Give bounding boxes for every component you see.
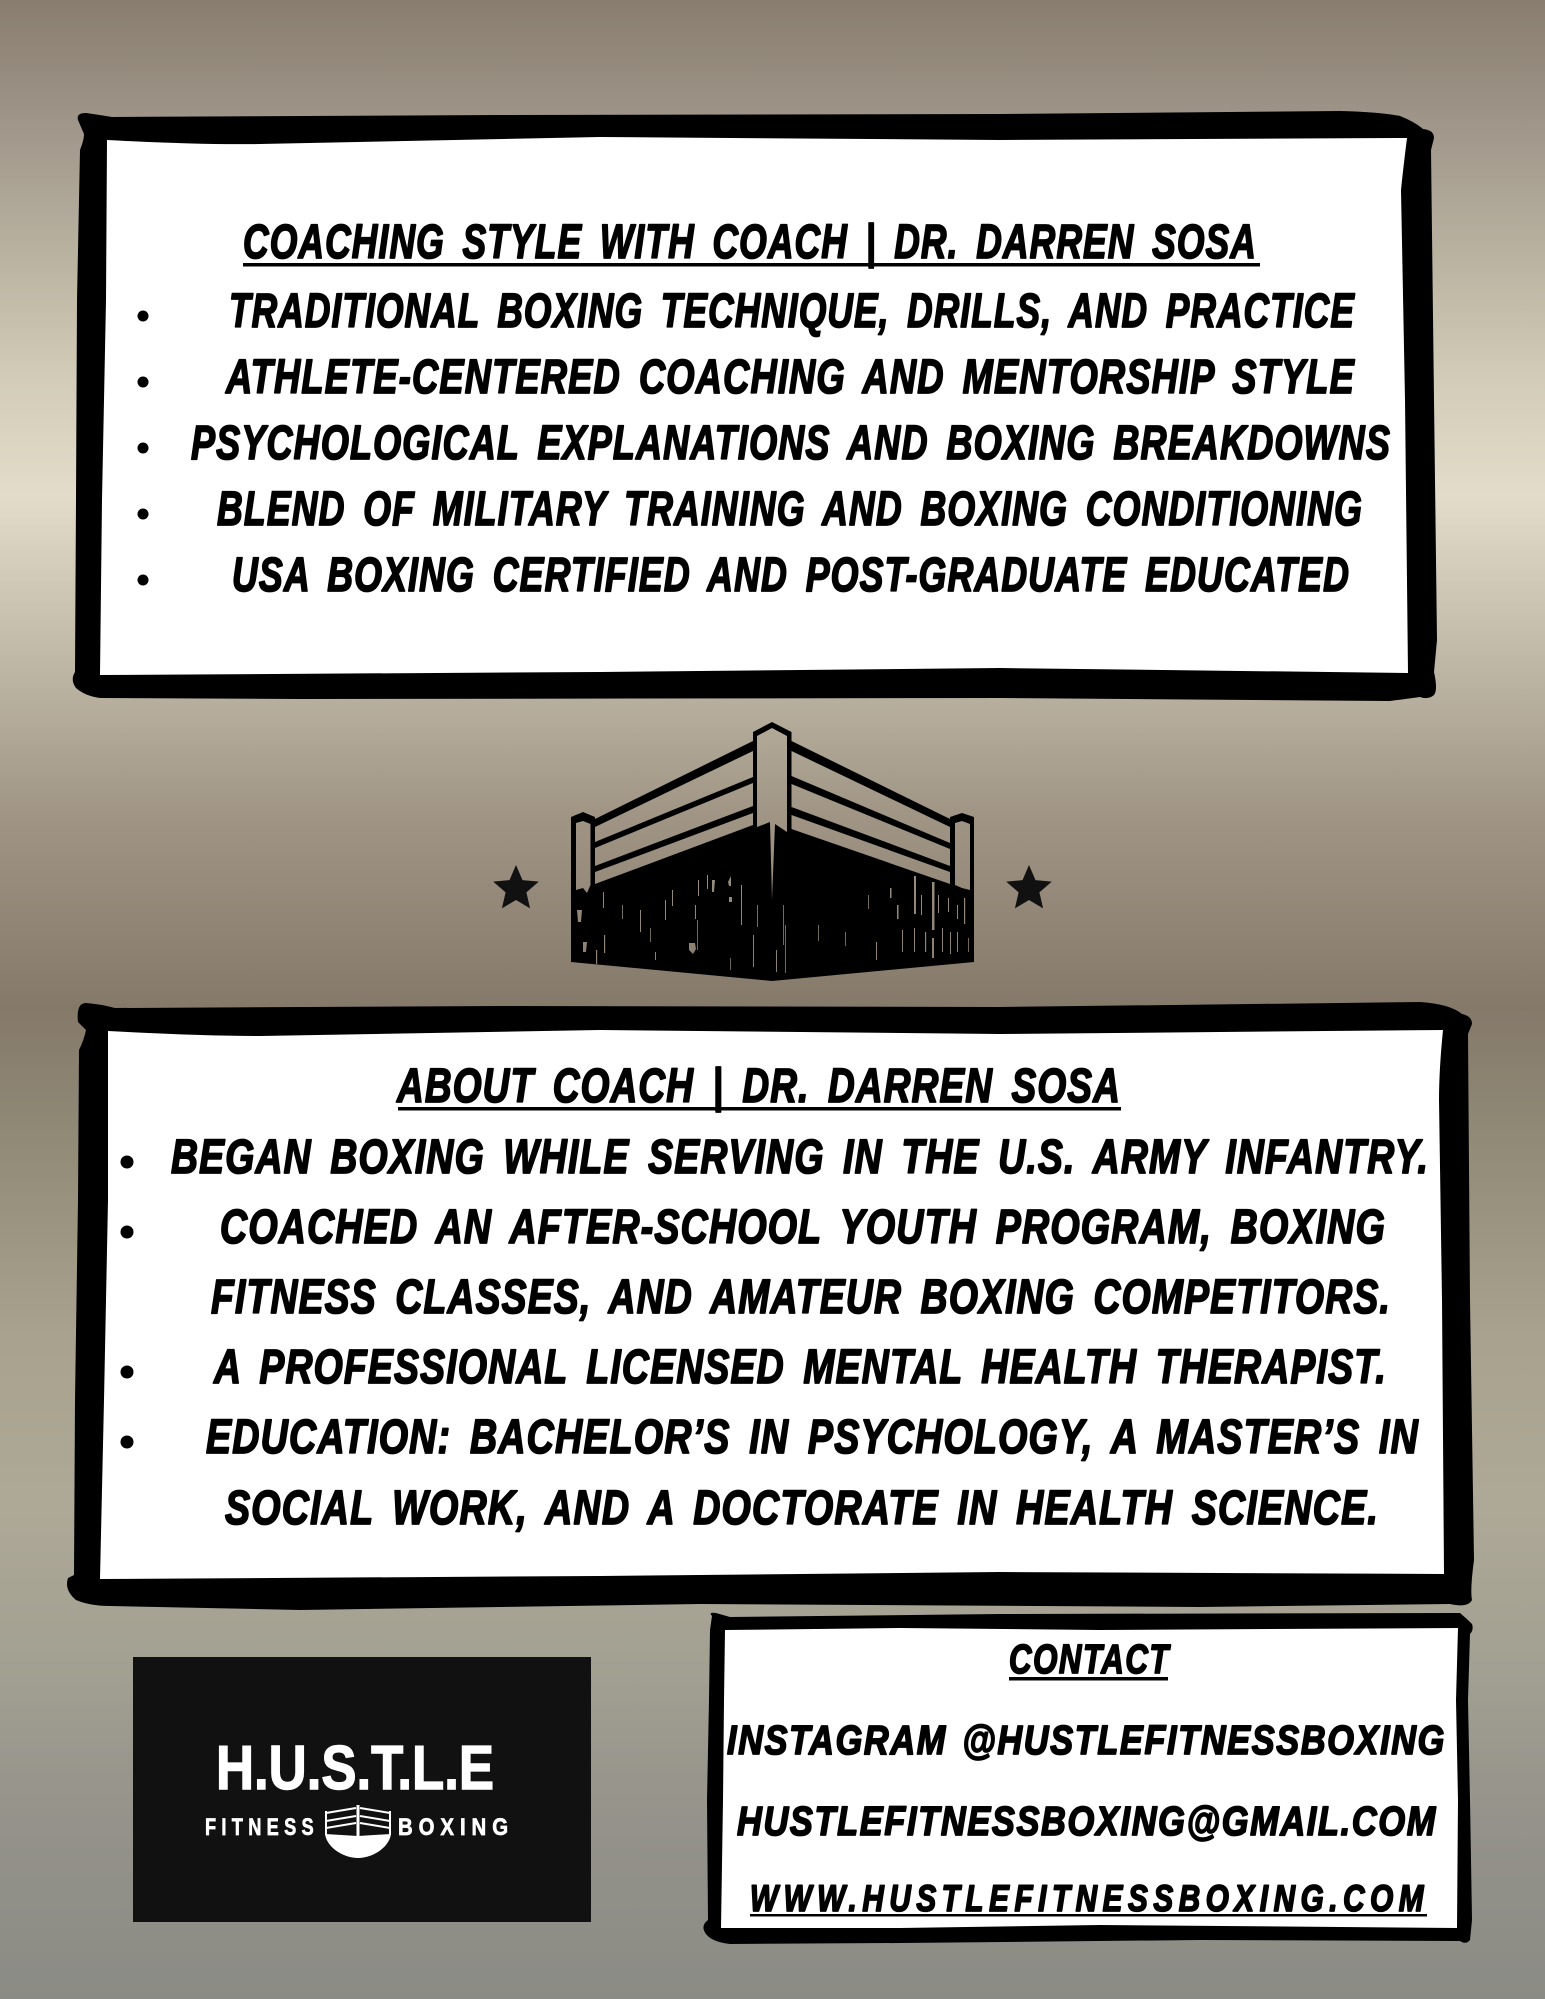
- panel: about coach: [67, 1002, 1474, 1610]
- panel: coaching style: [73, 111, 1437, 701]
- icon: star left: [493, 865, 539, 908]
- logo: hustle fitness boxing: [133, 1657, 591, 1922]
- logo icon: ring: [325, 1805, 391, 1858]
- icon: boxing ring: [571, 722, 974, 981]
- panel: contact: [703, 1613, 1473, 1944]
- logo wordmark: H.U.S.T.L.E: [216, 1734, 494, 1803]
- logo label: boxing: BOXING: [398, 1814, 514, 1841]
- list: about coach bullets: [120, 1131, 1429, 1535]
- icon: star right: [1006, 865, 1052, 908]
- contact heading: CONTACT: [1009, 1636, 1171, 1682]
- logo label: fitness: FITNESS: [205, 1814, 319, 1841]
- list: coaching style bullets: [138, 285, 1391, 602]
- heading: about coach: ABOUT COACH | DR. DARREN SOSA: [396, 1060, 1121, 1113]
